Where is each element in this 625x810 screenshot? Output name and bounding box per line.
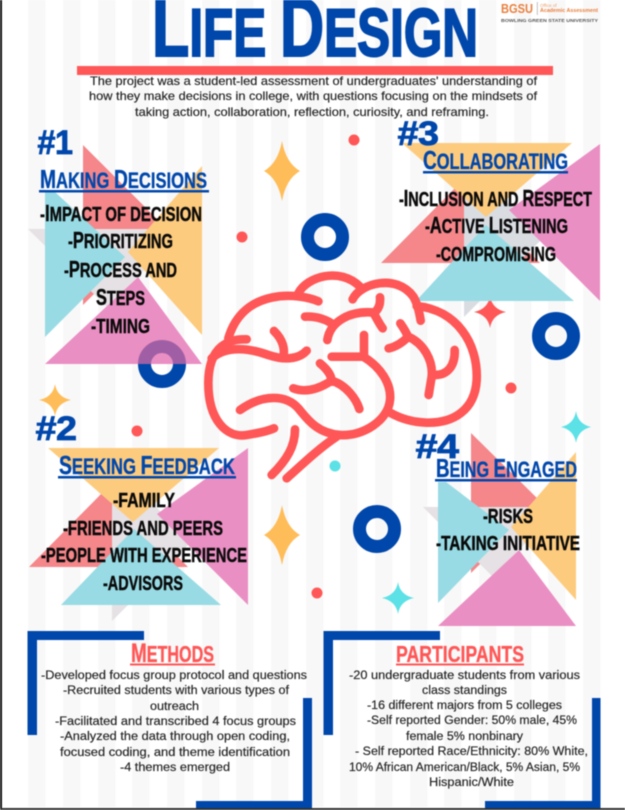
panel: participants (324, 631, 600, 808)
panel: #3 collaborating (381, 115, 600, 317)
panel: #1 making decisions (28, 124, 209, 382)
text: methods list (41, 670, 307, 774)
text: participants list: - Self reported Race/Ethnicity: 80% White, (355, 746, 588, 758)
bracket top left (28, 631, 144, 735)
icon: red star (474, 296, 506, 328)
list: seeking feedback: -ADVISORS (103, 572, 183, 595)
list: being engaged: -RISKS (483, 505, 533, 528)
list: being engaged: -TAKING INITIATIVE (436, 532, 580, 555)
icon: large orange star top (264, 141, 300, 201)
text: methods list: focused coding, and theme identification (60, 747, 290, 759)
pinwheel shapes 1 (28, 145, 202, 382)
text: participants list: female 5% nonbinary (406, 731, 523, 743)
text: methods list: -Analyzed the data through open coding, (60, 731, 290, 743)
text: methods list: outreach (150, 701, 199, 713)
logo: BGSU Office of Academic Assessment (501, 1, 598, 23)
dots (132, 134, 516, 598)
number 4: #4 (415, 428, 459, 466)
text: methods list: -Developed focus group protocol and questions (41, 670, 307, 682)
bracket bottom right (196, 698, 312, 808)
panel: methods (28, 631, 312, 808)
text: participants list: 10% African American/Black, 5% Asian, 5% (349, 762, 580, 774)
list: making decisions (40, 200, 202, 338)
list: collaborating (399, 185, 592, 266)
list: collaborating: -INCLUSION AND RESPECT (399, 185, 592, 211)
icon: blue ring bottom centre (360, 512, 394, 546)
intro text: The project was a student-led assessment of undergraduates' understanding of (90, 74, 538, 88)
bracket top left (324, 631, 440, 735)
icon: brain (208, 276, 477, 478)
heading: participants: PARTICIPANTS (396, 641, 524, 667)
text: participants list: -20 undergraduate students from various (349, 670, 580, 682)
panel: #4 being engaged (415, 428, 580, 626)
text: methods list: -Facilitated and transcribed 4 focus groups (55, 716, 296, 728)
decorative stars, dots and rings (39, 134, 591, 614)
intro text: taking action, collaboration, reflection, curiosity, and reframing. (135, 105, 489, 119)
number 1: #1 (37, 124, 73, 162)
heading: methods: METHODS (131, 638, 214, 668)
icon: cyan star bottom (382, 582, 414, 614)
logo: BGSU Office of Academic Assessment: Office of (540, 3, 557, 8)
panel: #2 seeking feedback (29, 410, 248, 621)
text: participants list: Hispanic/White (429, 777, 514, 789)
number 2: #2 (35, 410, 77, 448)
heading: making decisions: MAKING DECISIONS (40, 166, 207, 194)
list: collaborating: -COMPROMISING (436, 243, 556, 266)
list: seeking feedback: -PEOPLE WITH EXPERIENCE (41, 544, 247, 567)
heading: seeking feedback: SEEKING FEEDBACK (59, 452, 235, 480)
bracket bottom right (485, 698, 600, 808)
text: methods list: -4 themes emerged (120, 762, 230, 774)
text: methods list: -Recruited students with various types of (63, 685, 290, 697)
intro text (89, 74, 538, 119)
logo: BGSU Office of Academic Assessment: BOWLING GREEN STATE UNIVERSITY (501, 18, 598, 23)
list: seeking feedback (41, 489, 247, 595)
text: participants list: class standings (422, 685, 507, 697)
intro text: how they make decisions in college, with questions focusing on the mindsets of (89, 89, 538, 103)
list: making decisions: -PRIORITIZING (68, 227, 173, 253)
list: making decisions: STEPS (96, 284, 145, 310)
text: participants list: -16 different majors from 5 colleges (367, 700, 562, 712)
icon: small orange star (39, 384, 71, 416)
icon: blue ring right (538, 318, 574, 354)
list: making decisions: -TIMING (91, 315, 150, 338)
pinwheel shapes 3 (381, 143, 600, 317)
text: participants list: -Self reported Gender: 50% male, 45% (367, 715, 577, 727)
list: seeking feedback: -FAMILY (113, 489, 175, 512)
red title rule (77, 66, 553, 75)
logo: BGSU Office of Academic Assessment: Academic Assessment (540, 8, 598, 14)
list: seeking feedback: -FRIENDS AND PEERS (63, 517, 223, 540)
pinwheel shapes 4 (423, 433, 576, 626)
number 3: #3 (397, 115, 439, 153)
icon: large orange star bottom (264, 505, 300, 565)
icon: blue ring top centre (308, 220, 342, 254)
heading: being engaged: BEING ENGAGED (436, 455, 577, 483)
heading: collaborating: COLLABORATING (423, 147, 568, 175)
text: participants list (349, 670, 588, 789)
logo: BGSU Office of Academic Assessment: BGSU (501, 1, 533, 16)
list: being engaged (436, 505, 580, 555)
list: making decisions: -IMPACT OF DECISION (40, 200, 202, 226)
list: making decisions: -PROCESS AND (64, 256, 177, 282)
pinwheel shapes 2 (29, 448, 248, 621)
list: collaborating: -ACTIVE LISTENING (425, 212, 568, 238)
icon: cyan star right (561, 411, 591, 443)
